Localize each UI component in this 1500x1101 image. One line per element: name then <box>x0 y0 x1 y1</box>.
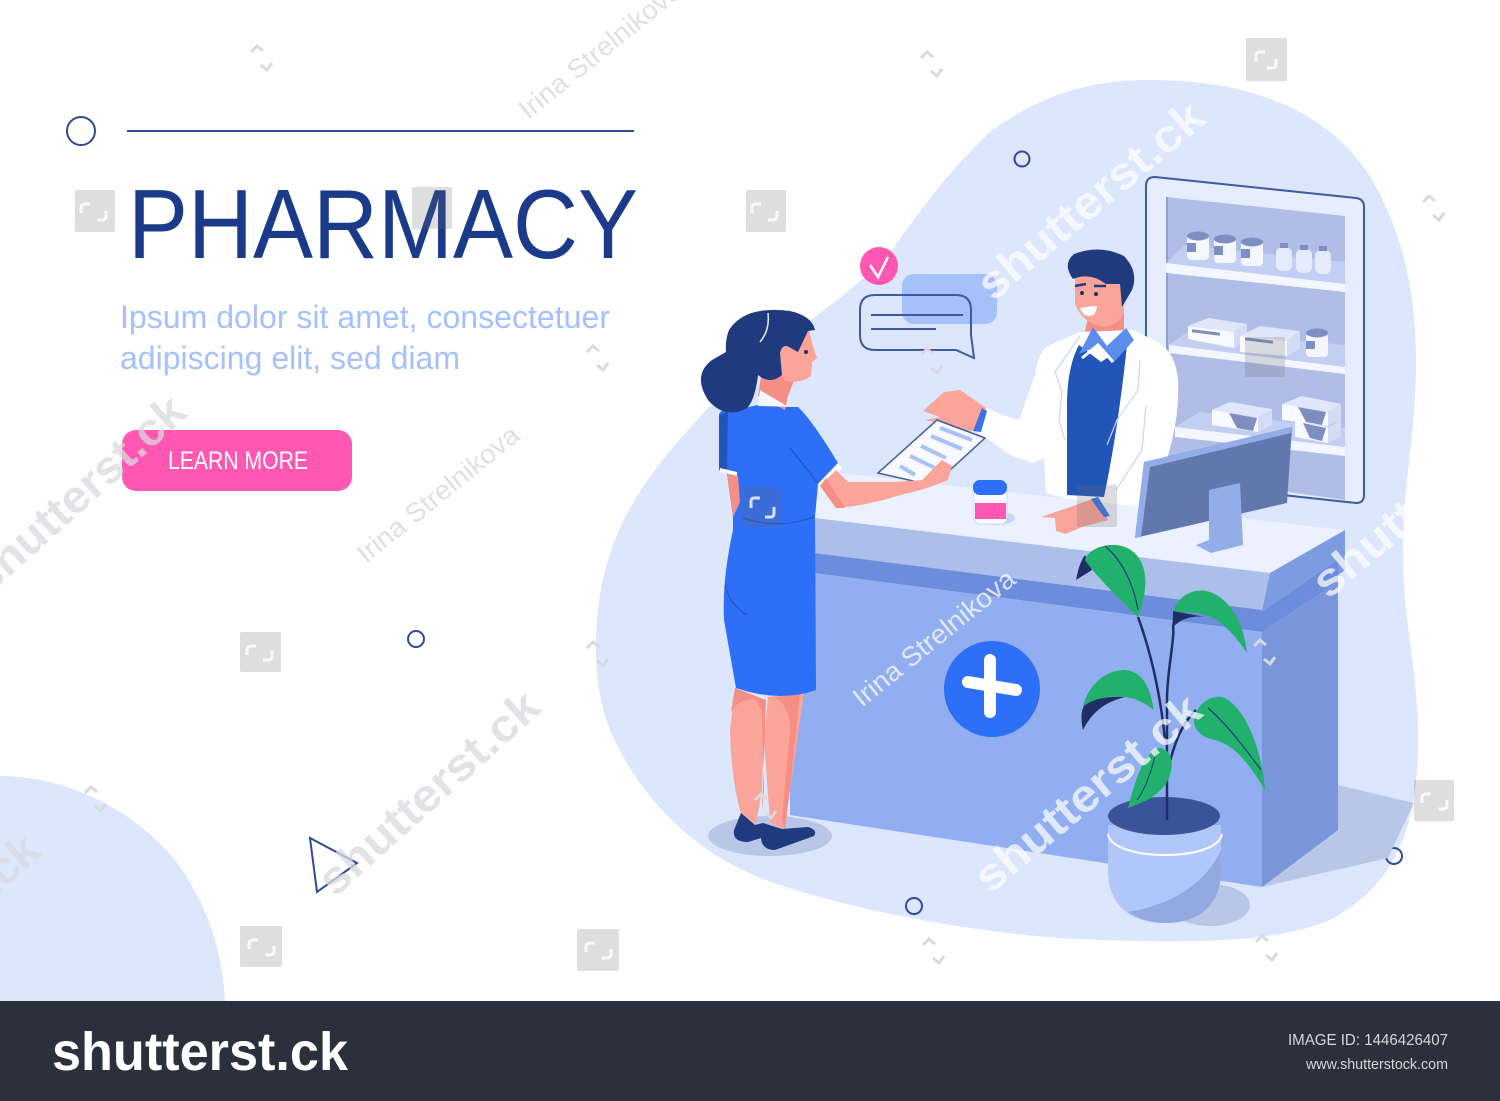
decor: triangle <box>310 838 357 892</box>
pharmacist collar <box>1079 327 1134 362</box>
shelf boards <box>1166 245 1345 456</box>
sleeve trims <box>720 463 842 488</box>
pharmacist hair <box>1068 249 1134 307</box>
boxes middle shelf <box>1188 318 1328 357</box>
body text: Ipsum dolor sit amet, consectetuer <box>120 299 610 335</box>
dress dark side <box>719 412 728 470</box>
decor: small circles <box>408 152 1402 914</box>
pot <box>1108 797 1222 923</box>
shelf cabinet <box>1146 177 1364 503</box>
counter front band <box>814 518 1270 611</box>
watermark: logo marks <box>81 52 1447 958</box>
counter side <box>1262 530 1345 632</box>
icon: check badge <box>860 247 898 285</box>
pharmacist <box>923 249 1178 520</box>
stems <box>1138 617 1196 820</box>
cross badge <box>944 641 1040 737</box>
dress <box>719 405 838 696</box>
legs <box>730 688 804 830</box>
footer image id: IMAGE ID: 1446426407 <box>1288 1032 1448 1049</box>
footer image id: www.shutterstock.com <box>1305 1056 1448 1073</box>
footer image id <box>1288 1032 1448 1073</box>
pharmacist left hand <box>923 390 986 431</box>
body text: adipiscing elit, sed diam <box>120 340 460 376</box>
background blob: main <box>596 80 1418 941</box>
watermark: diagonal text: Irina Strelnikova <box>351 419 526 569</box>
monitor <box>1135 427 1292 553</box>
boxes bottom shelf <box>1212 396 1341 443</box>
decor: header circle <box>67 117 95 145</box>
pharmacist shirt <box>1067 345 1127 497</box>
customer woman <box>701 310 952 856</box>
watermark: free logo marks <box>85 46 1444 963</box>
hair highlight <box>760 313 768 342</box>
pot shadow <box>1170 884 1250 926</box>
arm <box>821 460 952 508</box>
pharmacist left cuff <box>973 408 987 432</box>
face <box>778 325 817 382</box>
monitor stand <box>1196 483 1243 553</box>
wrist watch <box>1091 497 1110 517</box>
pharmacist coat <box>978 330 1178 520</box>
pharmacist features <box>1075 284 1106 316</box>
button: learn more <box>122 430 352 491</box>
footer logo: shutterst.ck <box>52 1022 349 1082</box>
floor shadow of counter <box>1262 785 1414 887</box>
watermark: diagonal text: Irina Strelnikova <box>847 563 1022 713</box>
coat lapel lines <box>1055 336 1146 490</box>
hair <box>701 310 815 412</box>
button: learn more: LEARN MORE <box>168 447 308 475</box>
pharmacist hand on counter <box>1041 497 1110 534</box>
waist and sleeve seams <box>725 448 817 615</box>
prescription paper <box>878 420 985 483</box>
pharmacist neck <box>1084 310 1124 362</box>
counter <box>790 470 1345 887</box>
body text <box>120 299 610 376</box>
plant <box>1076 545 1265 926</box>
chat bubble <box>860 274 997 358</box>
watermark: diagonal text: shutterst.ck <box>307 679 550 905</box>
counter dark band <box>814 553 1270 632</box>
pharmacist face <box>1075 264 1124 326</box>
title: PHARMACY <box>128 169 638 279</box>
footer bar <box>0 1001 1500 1101</box>
background blob: bottom left <box>0 776 225 1001</box>
neck <box>758 370 795 410</box>
decor: header line <box>127 130 634 132</box>
counter top <box>814 470 1345 573</box>
watermark: squares <box>75 38 1454 971</box>
eye <box>804 350 808 354</box>
shoes <box>734 813 815 850</box>
watermark: diagonal text: shutterst.ck <box>966 90 1214 310</box>
medicine jar <box>973 480 1015 525</box>
watermark: diagonal text: shutterst <box>1301 430 1499 608</box>
shadow under feet <box>708 816 832 856</box>
watermark: diagonal text: shutterst.ck <box>963 683 1211 903</box>
counter front <box>790 570 1262 887</box>
jars top shelf <box>1187 232 1331 274</box>
collar <box>758 390 798 407</box>
back arm <box>727 474 740 517</box>
leaves <box>1076 545 1265 808</box>
